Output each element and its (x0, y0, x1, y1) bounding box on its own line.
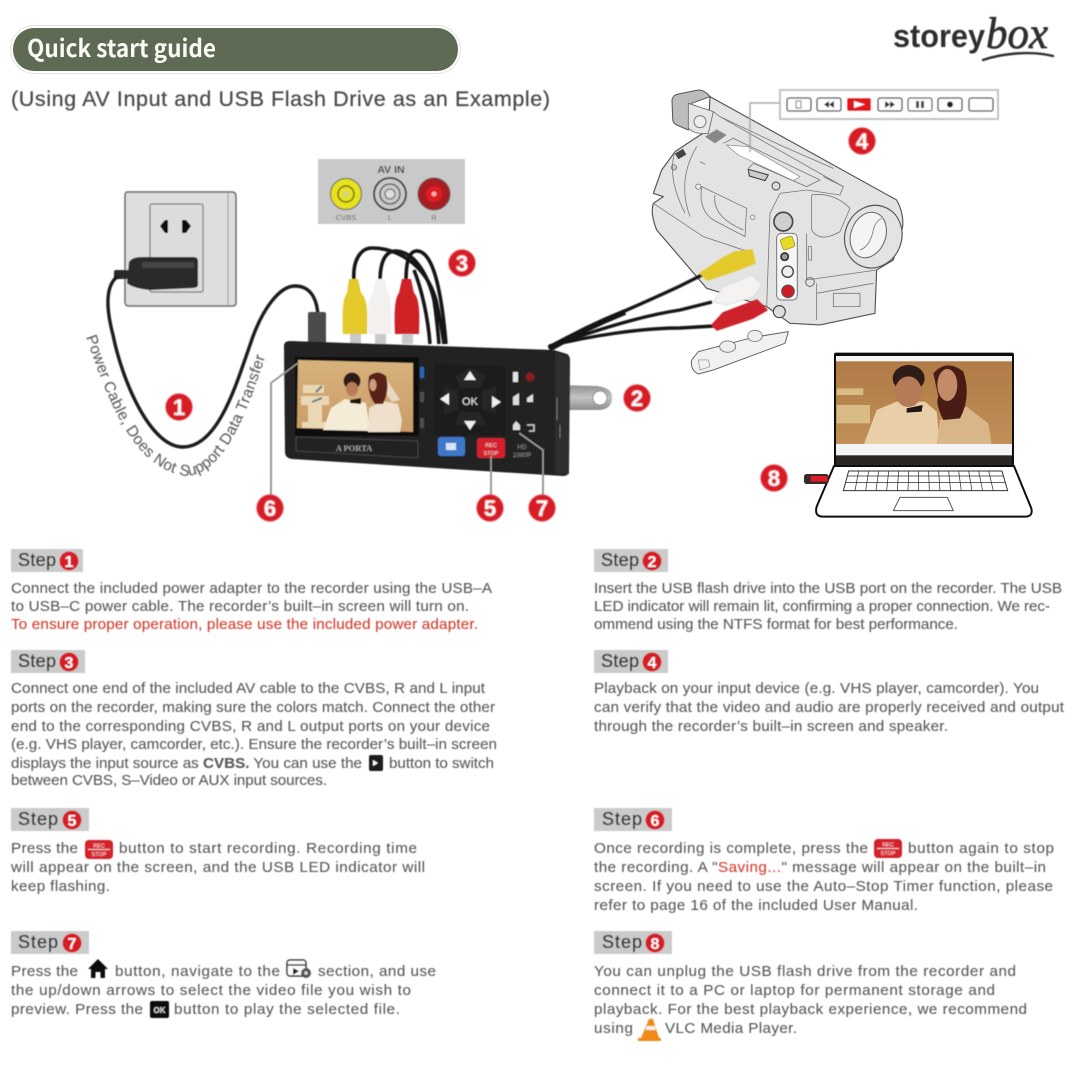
step 3: Connect one end of the included AV cable to the CVBS, R and L input (11, 680, 486, 697)
step 7: preview. Press the (11, 1001, 143, 1018)
step 3 (11, 650, 497, 789)
step 1: To ensure proper operation, please use the included power adapter. (11, 616, 478, 633)
step 6: STOP (881, 851, 896, 857)
logo: storeybox (893, 9, 1053, 60)
step 3: Step (18, 651, 56, 671)
device keypad (434, 364, 505, 435)
step 1: 1 (65, 554, 74, 571)
callout 8 (760, 464, 788, 492)
panel: AV IN ports: R (431, 213, 437, 222)
panel: AV IN ports: CVBS (336, 213, 356, 222)
step 7: the up/down arrows to select the video file you wish to (11, 982, 411, 999)
label: power cable note: Power Cable, Does Not Support Data Transfer (86, 334, 265, 477)
step 5: keep flashing. (11, 878, 110, 895)
illustration: video recorder device: A PORTA (336, 443, 373, 453)
logo: storeybox: box (986, 9, 1048, 58)
step 3: button to switch (389, 755, 494, 772)
step 6: refer to page 16 of the included User Manual. (594, 897, 918, 914)
callout 3: 3 (456, 251, 468, 276)
device keypad: OK (462, 396, 479, 408)
step 5 (10, 808, 425, 895)
step 4: 4 (648, 655, 657, 672)
callout 5 (476, 494, 504, 522)
callout 2 (624, 384, 650, 412)
step 4: can verify that the video and audio are properly received and output (594, 699, 1065, 716)
step 6: Step (602, 809, 642, 829)
step 8: 8 (651, 936, 660, 953)
callout 3 (448, 250, 476, 276)
logo: storeybox: storey (893, 18, 985, 54)
step 2: ommend using the NTFS format for best performance. (594, 616, 958, 633)
illustration: power cable (108, 276, 326, 447)
step 1 (11, 549, 493, 633)
step 5: STOP (92, 852, 107, 858)
step 3: ports on the recorder, making sure the colors match. Connect the other (11, 699, 495, 716)
title banner: Quick start guide (27, 29, 216, 64)
step 6: Once recording is complete, press the (594, 840, 868, 857)
step 6: the recording. A "Saving..." message will appear on the built–in (594, 859, 1046, 876)
step 2: Insert the USB flash drive into the USB port on the recorder. The USB (594, 580, 1062, 597)
callout 7: 7 (536, 496, 548, 521)
step 1: Step (18, 550, 56, 570)
callout 1: 1 (173, 395, 185, 420)
step 7: OK (154, 1006, 166, 1015)
illustration: video recorder device: REC (485, 443, 497, 449)
illustration: USB flash drive in recorder (560, 385, 612, 410)
step 7: button to play the selected file. (174, 1001, 400, 1018)
illustration: video recorder device: STOP (484, 451, 499, 457)
illustration: AV cables and RCA plugs (343, 248, 446, 344)
step 6: 6 (651, 813, 660, 830)
panel: camcorder control buttons (750, 90, 998, 152)
step 7: 7 (68, 936, 77, 953)
step 8: playback. For the best playback experience, we recommend (594, 1001, 1027, 1018)
step 3: (e.g. VHS player, camcorder, etc.). Ensure the recorder’s built–in screen (11, 736, 497, 753)
callout 1 (166, 394, 192, 420)
panel: AV IN ports (318, 159, 465, 224)
step 5: button to start recording. Recording time (119, 840, 417, 857)
step 7 (11, 931, 436, 1018)
leader lines (271, 363, 543, 495)
callout 4 (848, 128, 876, 154)
step 2: LED indicator will remain lit, confirming a proper connection. We rec- (594, 598, 1050, 615)
step 3: displays the input source as CVBS. You can use the (11, 755, 362, 772)
illustration: video recorder device: 1080P (513, 452, 531, 459)
step 8: Step (602, 932, 642, 952)
step 5: Press the (11, 840, 78, 857)
step 6: screen. If you need to use the Auto–Stop Timer function, please (594, 878, 1053, 895)
illustration: camcorder (652, 90, 911, 374)
callout 5: 5 (484, 496, 496, 521)
callout 2: 2 (631, 386, 643, 411)
step 8 (594, 931, 1027, 1041)
step 5: 5 (68, 813, 77, 830)
step 2 (594, 549, 1062, 633)
callout 4: 4 (856, 129, 869, 154)
illustration: laptop with USB drive (804, 353, 1032, 517)
callout 6: 6 (264, 496, 276, 521)
callout 7 (528, 494, 556, 522)
step 5: REC (93, 844, 105, 850)
step 7: Step (18, 932, 58, 952)
device screen photo (297, 360, 413, 432)
panel: AV IN ports: AV IN (377, 164, 405, 176)
step 7: section, and use (318, 963, 436, 980)
step 7: Press the (11, 963, 78, 980)
step 2: 2 (648, 554, 657, 571)
step 2: Step (601, 550, 639, 570)
subtitle: (Using AV Input and USB Flash Drive as an Example) (11, 87, 550, 111)
step 6 (594, 808, 1054, 914)
step 4: Step (601, 651, 639, 671)
step 6: REC (882, 842, 894, 848)
step 3: end to the corresponding CVBS, R and L output ports on your device (11, 718, 490, 735)
step 4: through the recorder’s built–in screen and speaker. (594, 718, 948, 735)
step 1: to USB–C power cable. The recorder’s built–in screen will turn on. (11, 598, 469, 615)
illustration: wall socket with power adapter (114, 192, 236, 306)
step 3: 3 (65, 655, 74, 672)
illustration: video recorder device (284, 341, 570, 476)
step 5: Step (18, 809, 58, 829)
step 8: You can unplug the USB flash drive from the recorder and (594, 963, 1016, 980)
step 5: will appear on the screen, and the USB LED indicator will (10, 859, 425, 876)
panel: AV IN ports: L (388, 213, 392, 222)
illustration: video recorder device: HD (517, 444, 527, 451)
step 4 (594, 650, 1065, 735)
step 8: using (594, 1020, 633, 1037)
step 7: button, navigate to the (115, 963, 280, 980)
callout 6 (256, 494, 284, 522)
step 4: Playback on your input device (e.g. VHS player, camcorder). You (594, 680, 1039, 697)
step 8: connect it to a PC or laptop for permanent storage and (594, 982, 995, 999)
title banner (10, 26, 460, 74)
step 6: button again to stop (908, 840, 1054, 857)
step 3: between CVBS, S–Video or AUX input sources. (11, 772, 327, 789)
step 8: VLC Media Player. (665, 1020, 797, 1037)
camcorder eyepiece (672, 90, 710, 130)
camcorder side door (691, 330, 788, 374)
callout 8: 8 (768, 466, 780, 491)
illustration: cables to camcorder (549, 250, 767, 349)
step 1: Connect the included power adapter to the recorder using the USB–A (11, 580, 493, 597)
